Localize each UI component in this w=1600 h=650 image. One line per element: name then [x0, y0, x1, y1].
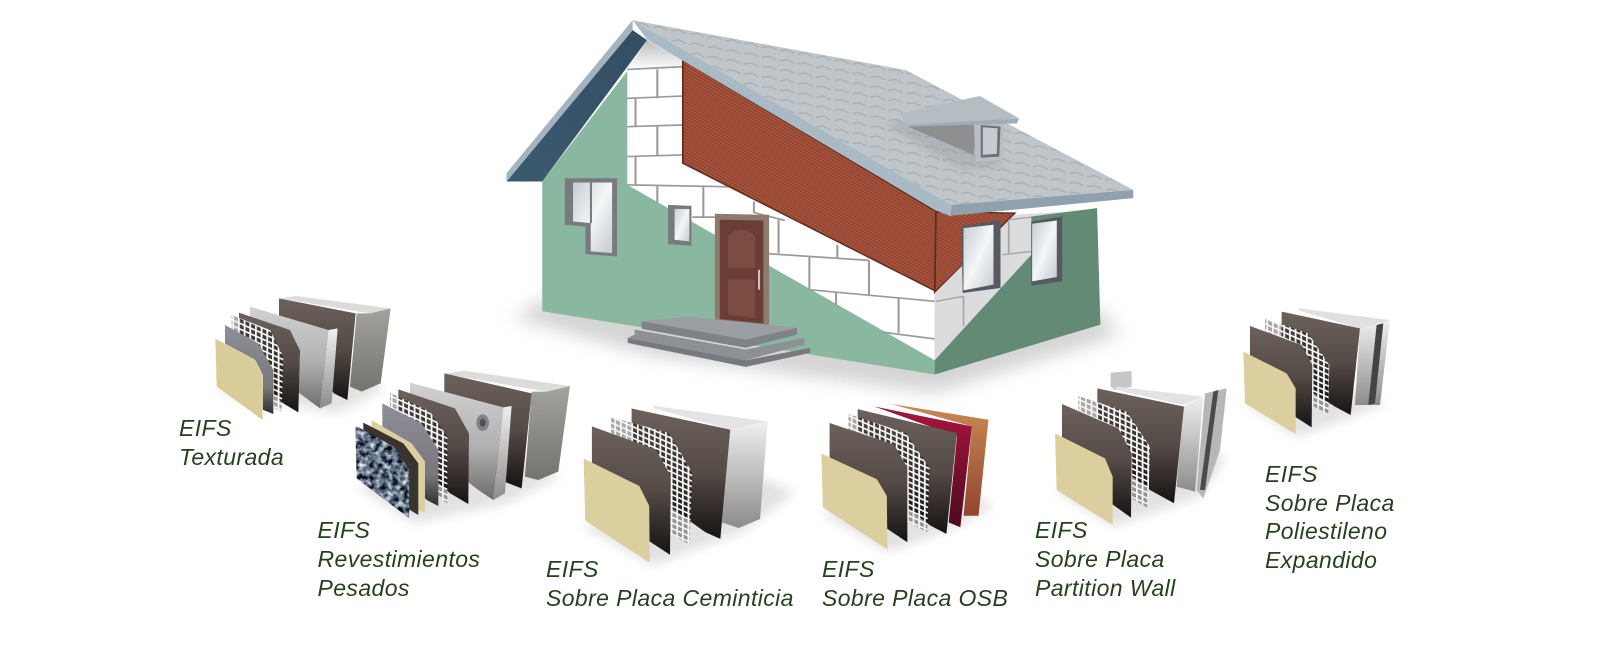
gypsum board	[1116, 387, 1203, 492]
label: Partition Wall	[1035, 575, 1176, 601]
dark board	[1097, 388, 1184, 503]
mesh	[1078, 396, 1150, 508]
label: Pesados	[318, 575, 410, 601]
EPS board	[1299, 308, 1390, 405]
label: Sobre Placa	[1265, 490, 1395, 516]
dark board	[1282, 312, 1360, 415]
sample: EIFS Sobre Placa OSB	[821, 404, 1008, 611]
door	[715, 214, 769, 325]
concrete block	[280, 296, 391, 392]
dormer	[883, 96, 1019, 170]
label: EIFS	[1265, 461, 1318, 487]
anchor washer	[476, 414, 489, 431]
mesh	[848, 414, 930, 532]
base coat	[1062, 404, 1132, 518]
label: EIFS	[179, 415, 232, 441]
label: EIFS	[822, 556, 875, 582]
sample: EIFS Texturada	[179, 296, 391, 470]
dark layer	[363, 423, 418, 515]
sample: EIFS Sobre Placa Poliestileno Expandido	[1243, 308, 1395, 573]
label: EIFS	[318, 517, 370, 543]
side window 2	[1031, 216, 1062, 286]
label: Sobre Placa	[1035, 546, 1165, 572]
brick section	[683, 60, 1015, 292]
anchor rods	[512, 405, 542, 416]
dark board	[279, 298, 356, 400]
EPS insulation	[410, 383, 512, 500]
front steps	[628, 317, 810, 367]
base coat	[830, 423, 907, 542]
label: EIFS	[546, 556, 599, 582]
mesh	[611, 417, 692, 545]
EPS insulation	[250, 307, 338, 408]
sample: EIFS Sobre Placa Partition Wall	[1035, 371, 1227, 601]
base coat	[398, 389, 469, 504]
concrete block	[445, 371, 570, 480]
small window	[668, 205, 691, 246]
dark board	[632, 408, 730, 539]
steel stud	[1197, 388, 1227, 498]
EPS board	[653, 406, 768, 528]
label: Expandido	[1265, 547, 1377, 573]
yellow finish	[821, 453, 887, 549]
red membrane	[874, 406, 972, 527]
label: EIFS	[1035, 517, 1088, 543]
main roof	[506, 20, 1133, 216]
house illustration	[506, 20, 1133, 393]
label: Revestimientos	[318, 546, 480, 572]
mesh	[1265, 318, 1329, 415]
side window 1	[961, 220, 1000, 293]
OSB board	[891, 404, 988, 516]
dark board	[444, 373, 532, 488]
left L-shaped window	[565, 178, 617, 256]
yellow finish	[1055, 433, 1113, 525]
gray coat	[225, 325, 273, 414]
ground shadow	[513, 300, 1118, 393]
base coat	[1250, 326, 1312, 427]
sample: EIFS Revestimientos Pesados	[318, 371, 570, 601]
stone facing	[355, 426, 410, 519]
base coat	[239, 313, 300, 412]
steel channel top	[1111, 371, 1132, 390]
label: Texturada	[179, 444, 284, 470]
sample: EIFS Sobre Placa Ceminticia	[546, 406, 795, 611]
front wall	[542, 67, 935, 375]
exposed insulation blocks	[627, 40, 935, 360]
label: Sobre Placa Ceminticia	[546, 585, 794, 611]
yellow finish	[1243, 352, 1296, 434]
mesh	[390, 393, 447, 503]
side wall	[935, 208, 1100, 375]
dark board	[858, 409, 957, 534]
yellow layer	[372, 420, 425, 513]
yellow finish	[584, 458, 650, 563]
gray coat	[382, 403, 438, 506]
mesh	[232, 315, 283, 412]
label: Poliestileno	[1265, 518, 1387, 544]
base coat	[592, 426, 671, 555]
yellow finish	[215, 339, 263, 420]
label: Sobre Placa OSB	[822, 585, 1008, 611]
